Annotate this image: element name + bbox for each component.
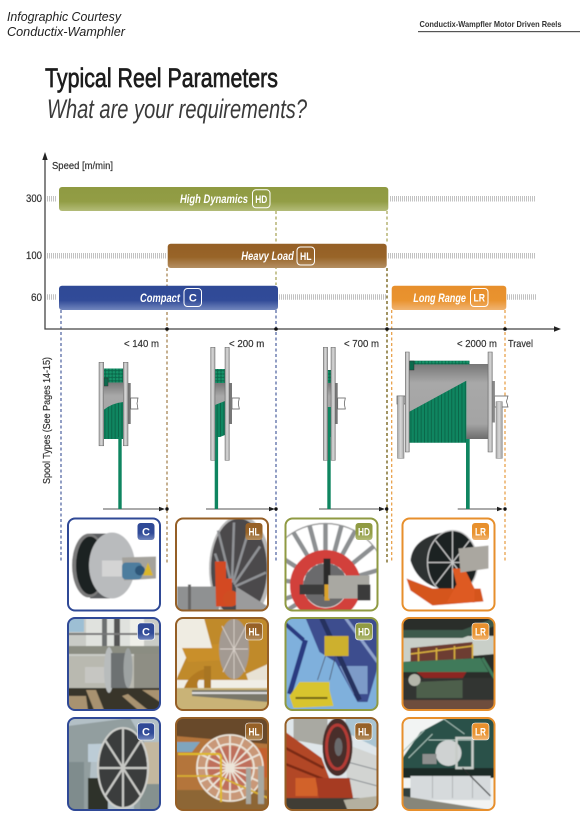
photo card: long range excavator xyxy=(402,618,494,710)
badge: HD xyxy=(358,526,370,538)
spool diagram: long range xyxy=(397,352,508,511)
spool diagram: high dynamics xyxy=(319,347,388,511)
badge: C xyxy=(142,526,150,538)
bar: high dynamics xyxy=(59,187,388,211)
photo card: compact reel outdoors xyxy=(68,718,160,810)
photo card: high dynamics reel product xyxy=(284,518,378,612)
axes xyxy=(42,152,561,332)
vertical label: spool types: Spool Types (See Pages 14-15) xyxy=(41,357,53,484)
bar: high dynamics: HD xyxy=(255,194,267,206)
badge: LR xyxy=(475,526,486,538)
badge: HL xyxy=(248,726,260,738)
travel distance labels: < 200 m xyxy=(229,338,265,350)
axis label: speed: Speed [m/min] xyxy=(52,161,113,172)
bar: long range xyxy=(392,286,506,310)
bar: compact: C xyxy=(189,292,197,304)
travel distance labels: < 2000 m xyxy=(457,338,497,350)
badge: LR xyxy=(475,626,486,638)
dashed guide lines xyxy=(61,211,505,563)
badge: C xyxy=(142,626,150,638)
photo card: heavy load reel behind fence xyxy=(176,718,268,810)
speed values: 100 xyxy=(26,250,42,262)
badge: HL xyxy=(358,726,369,738)
bar: high dynamics: High Dynamics xyxy=(180,194,248,206)
speed values xyxy=(26,193,42,304)
photo card: high dynamics crane xyxy=(286,618,378,710)
photo card: heavy load reel on site xyxy=(176,618,268,710)
chart: speed vs travel xyxy=(26,152,561,563)
photo card: compact reel on site xyxy=(68,618,160,710)
credit note: Infographic Courtesy xyxy=(7,10,122,24)
running header: Conductix-Wampfler Motor Driven Reels xyxy=(420,19,562,29)
badge: LR xyxy=(475,726,486,738)
badge: HL xyxy=(248,526,260,538)
photo card: heavy load reel product xyxy=(175,518,269,612)
bar: compact: Compact xyxy=(140,293,181,305)
bar: heavy load xyxy=(168,244,387,268)
travel distance labels: Travel xyxy=(508,338,533,350)
spool diagram: heavy load xyxy=(206,347,278,511)
badge: HL xyxy=(248,626,260,638)
bar: heavy load: HL xyxy=(300,251,312,263)
travel distance labels xyxy=(124,338,533,350)
spool diagram: compact xyxy=(99,362,169,511)
credit note: Conductix-Wamphler xyxy=(7,25,126,39)
title: Typical Reel Parameters xyxy=(45,63,278,93)
grid bands xyxy=(47,199,536,297)
bar: heavy load: Heavy Load xyxy=(241,251,295,263)
speed values: 60 xyxy=(31,292,42,304)
credit note xyxy=(7,10,126,39)
subtitle: What are your requirements? xyxy=(47,94,307,124)
travel distance labels: < 700 m xyxy=(344,338,379,350)
photo card: heavy load reel at container terminal xyxy=(286,718,378,810)
photo card: long range reel product xyxy=(402,518,494,610)
travel distance labels: < 140 m xyxy=(124,338,159,350)
bar: long range: Long Range xyxy=(413,293,466,305)
photo card: long range reel on large machine xyxy=(402,718,494,810)
bar: compact xyxy=(59,286,278,310)
bar: long range: LR xyxy=(474,292,485,304)
badge: C xyxy=(142,726,150,738)
speed values: 300 xyxy=(26,193,42,205)
badge: HD xyxy=(358,626,370,638)
photo card: compact reel product xyxy=(68,518,160,610)
